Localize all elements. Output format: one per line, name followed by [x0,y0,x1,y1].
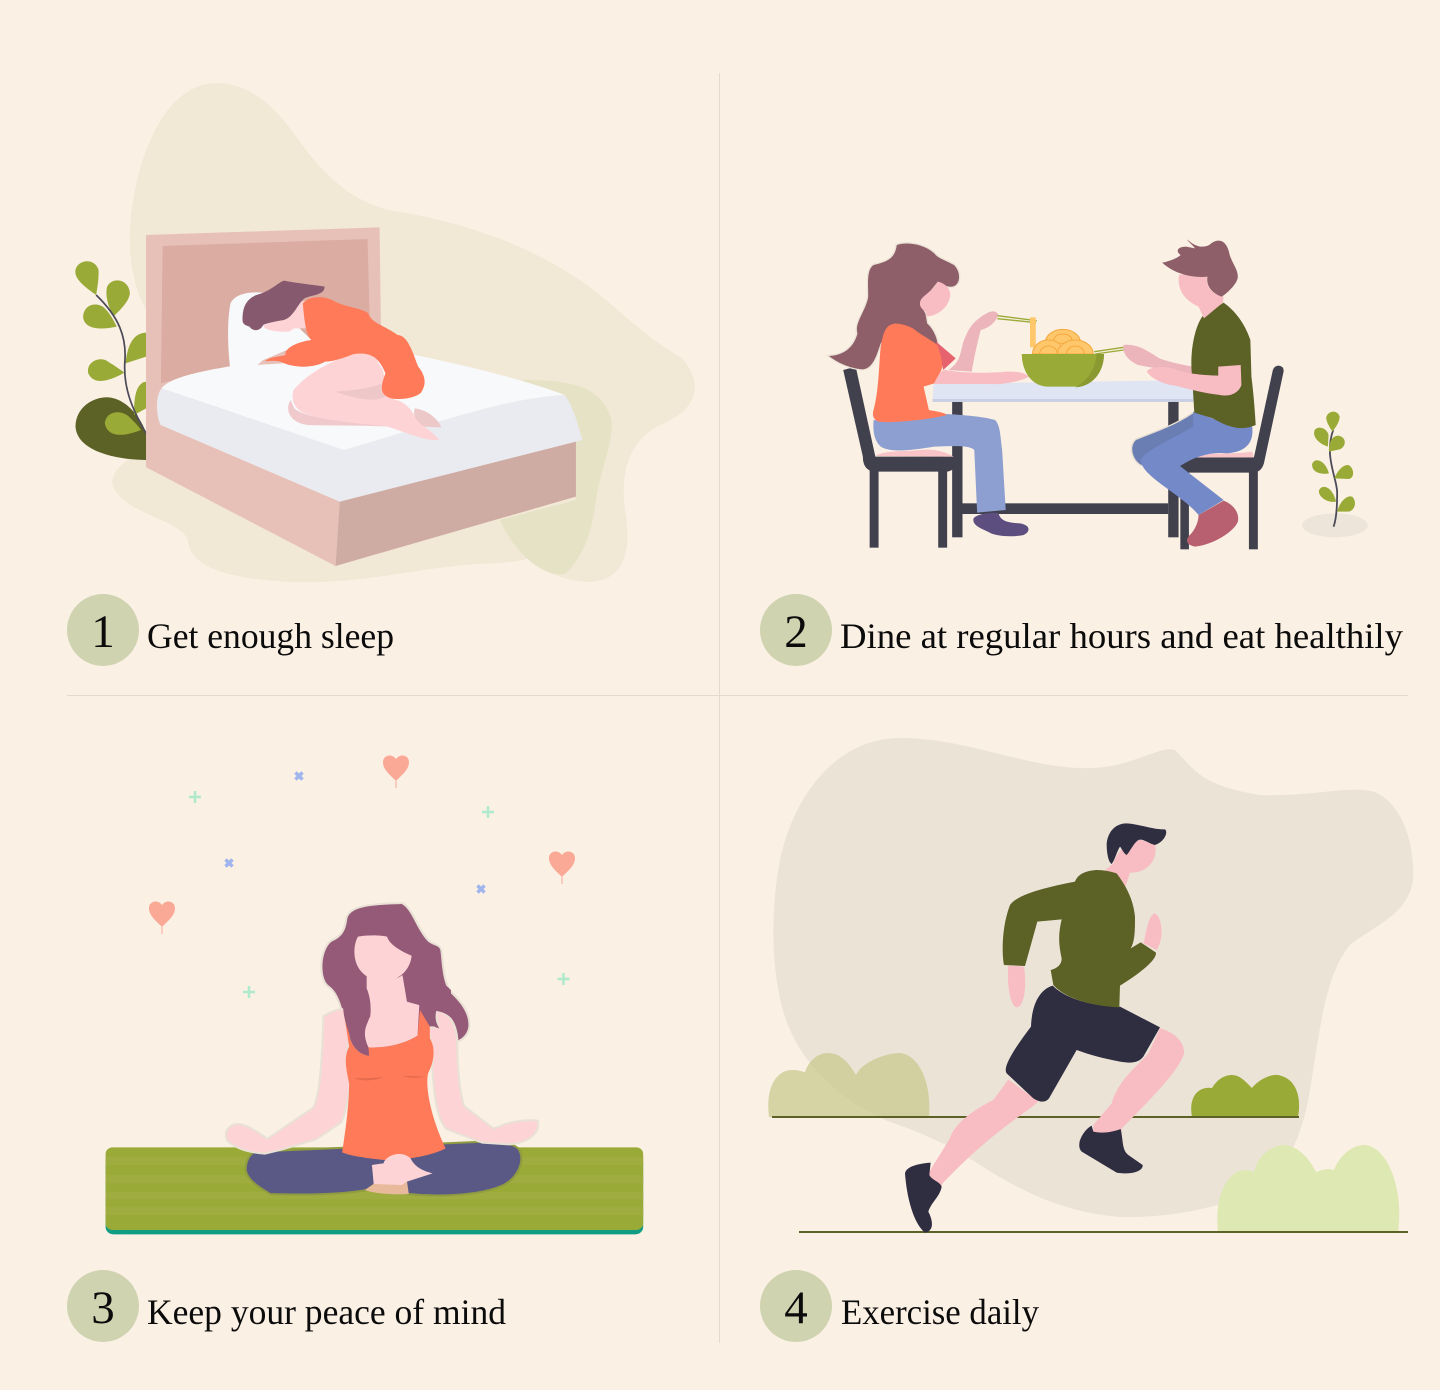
badge 3 [67,1270,139,1342]
icon: small plant [1302,412,1368,537]
caption 4: Exercise daily [841,1292,1039,1332]
badge 2 [760,594,832,666]
badge 1 [67,594,139,666]
background blobs [112,83,695,582]
noodle bowl [997,316,1124,387]
panel: get enough sleep [75,83,695,582]
caption 3: Keep your peace of mind [147,1292,506,1332]
runner [905,823,1184,1233]
meditating woman on mat [106,904,643,1234]
background blob [773,738,1413,1217]
badge 1: 1 [91,606,115,658]
icon: plant [75,261,146,460]
badge 3: 3 [91,1282,115,1334]
blue sparkles [226,772,484,892]
panel: dine at regular hours [829,239,1368,549]
caption 1: Get enough sleep [147,616,394,656]
ground lines [772,1117,1408,1232]
table [932,380,1194,537]
man eating [1123,239,1256,547]
sleeping woman [243,281,441,440]
hearts [149,755,575,934]
badge 2: 2 [784,606,808,658]
right chair [1179,366,1284,549]
badge 4 [760,1270,832,1342]
badge 4: 4 [784,1282,808,1334]
bushes [768,1053,1399,1232]
plus sparkles [189,791,570,998]
yoga mat [106,1147,643,1234]
woman [227,904,537,1195]
bed [146,227,582,566]
panel: exercise background [768,738,1413,1232]
caption 2: Dine at regular hours and eat healthily [840,616,1403,656]
panel: peace of mind decorations [149,755,575,998]
bed illustration [75,227,582,566]
woman eating [829,243,1029,536]
left chair [843,367,954,548]
